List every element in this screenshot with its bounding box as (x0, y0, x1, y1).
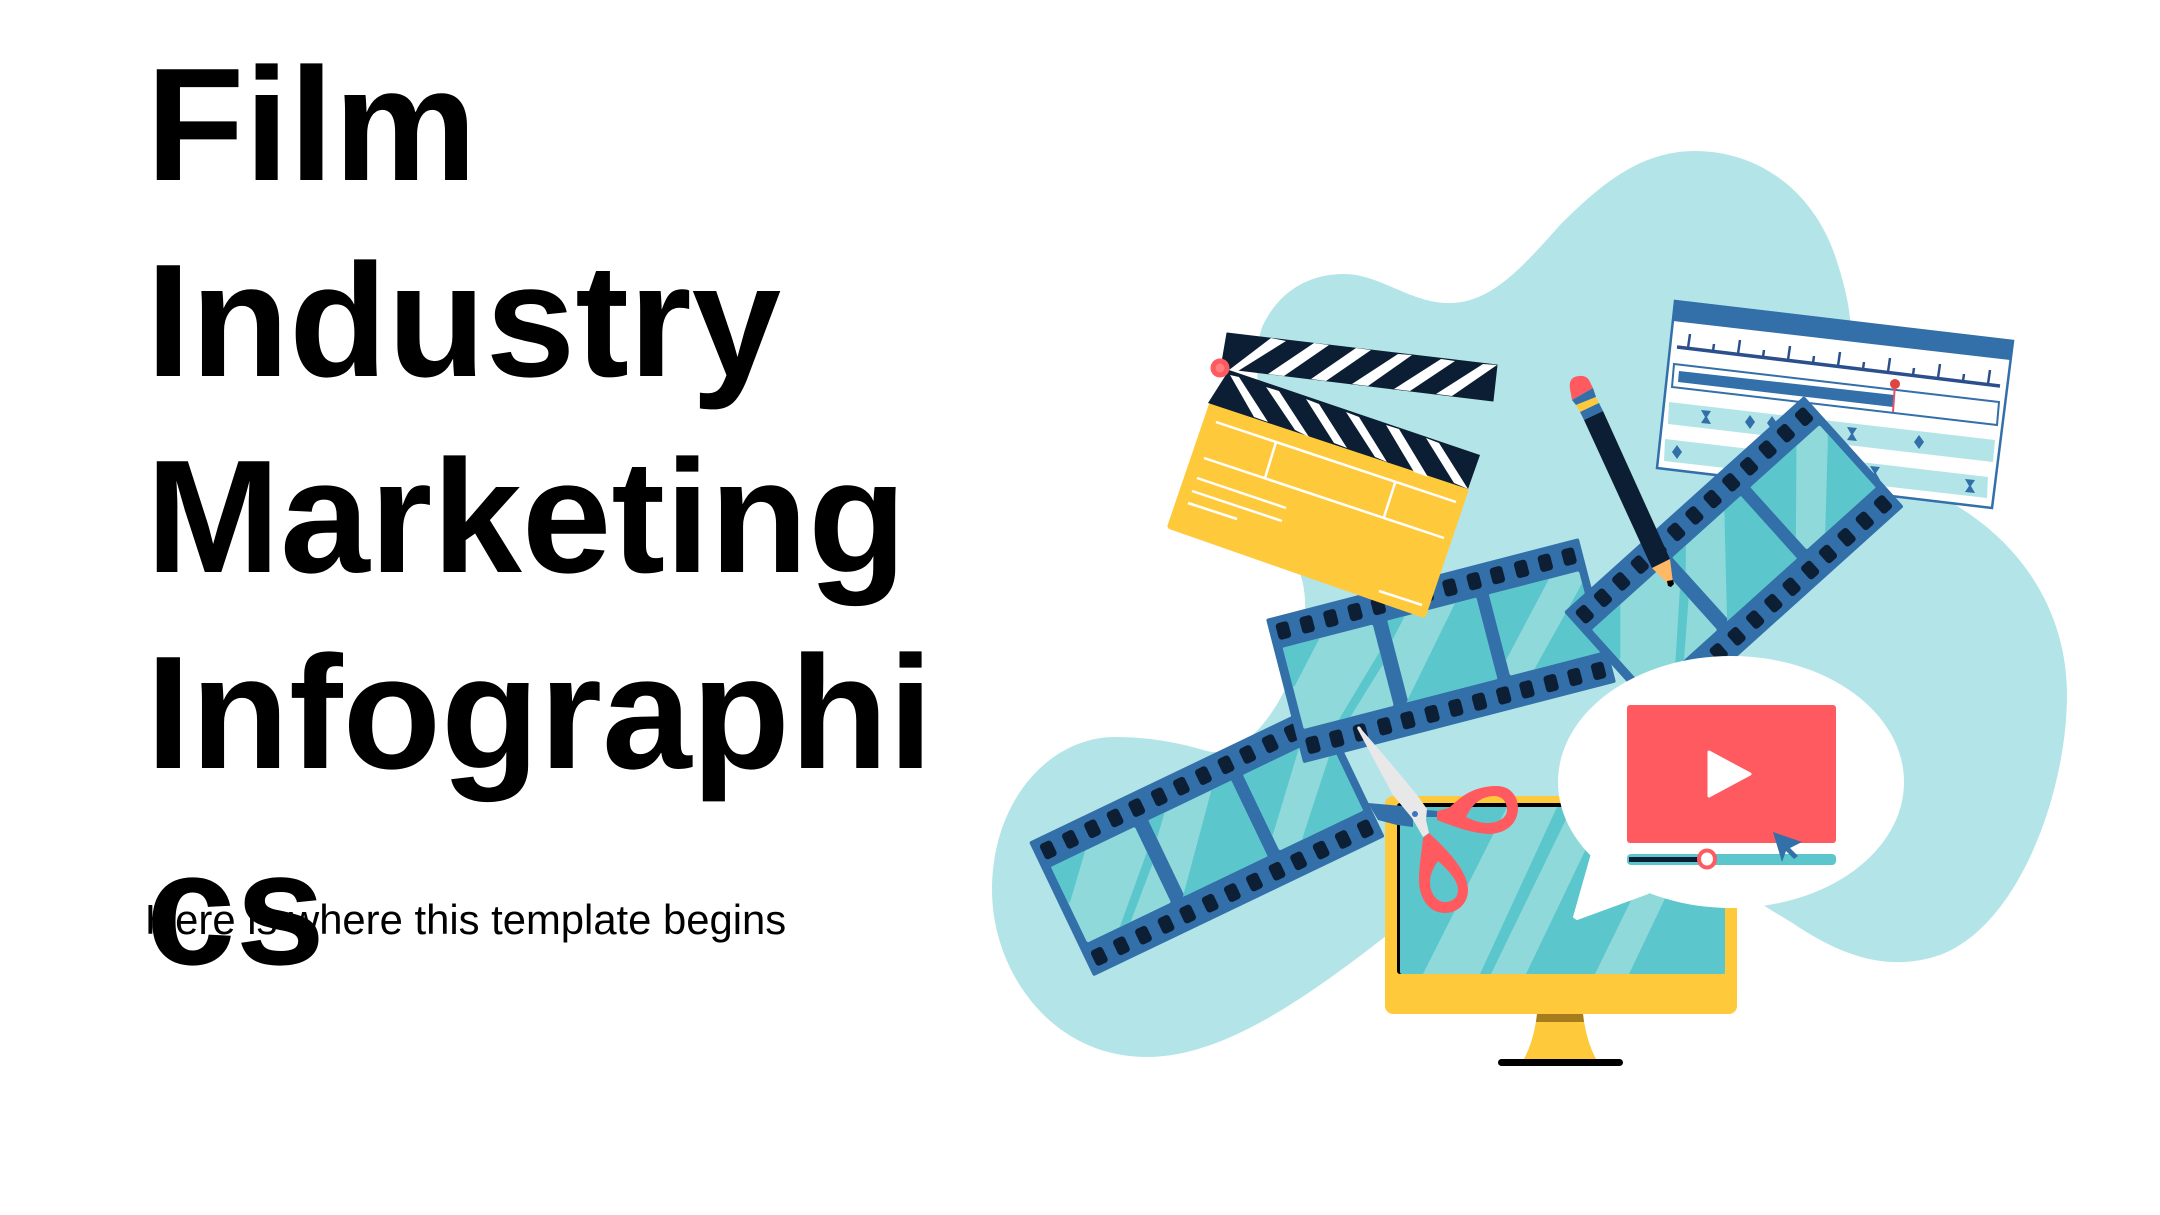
title: Film Industry Marketing Infographi cs (146, 35, 933, 999)
scissors lower blade (1368, 803, 1438, 827)
film strip: upper right (1564, 396, 1904, 723)
background blob (992, 151, 2067, 1057)
clapper body (1171, 406, 1465, 614)
pencil (1570, 376, 1674, 587)
clapper white lines (1188, 422, 1456, 605)
clapperboard (1171, 333, 1497, 614)
scissors handles (1437, 786, 1518, 834)
scissors (1357, 726, 1518, 913)
video progress bar (1627, 850, 1836, 868)
timeline panel (1657, 301, 2013, 508)
timeline header (1673, 301, 2013, 360)
scissors upper blade (1357, 726, 1429, 837)
monitor stand (1498, 1014, 1623, 1066)
clapper upper stick (1221, 333, 1497, 401)
monitor frame (1385, 796, 1737, 1014)
clapper hinge (1210, 358, 1230, 378)
progress bar (1678, 371, 1894, 407)
subtitle: Here is where this template begins (145, 896, 786, 943)
clapper lower stick (1208, 370, 1480, 489)
monitor (1385, 796, 1737, 1066)
cursor icon (1773, 832, 1802, 862)
play icon (1709, 752, 1750, 796)
film strip: middle (1266, 538, 1616, 763)
track box (1672, 364, 1999, 425)
speech bubble (1558, 656, 1904, 919)
film strip: lower left (1029, 702, 1385, 976)
monitor screen (1400, 807, 1725, 974)
timeline ruler (1677, 334, 2000, 386)
track rows (1664, 402, 1995, 498)
keyframe markers (1672, 410, 1975, 493)
video player (1627, 705, 1836, 843)
playhead (1890, 379, 1900, 412)
